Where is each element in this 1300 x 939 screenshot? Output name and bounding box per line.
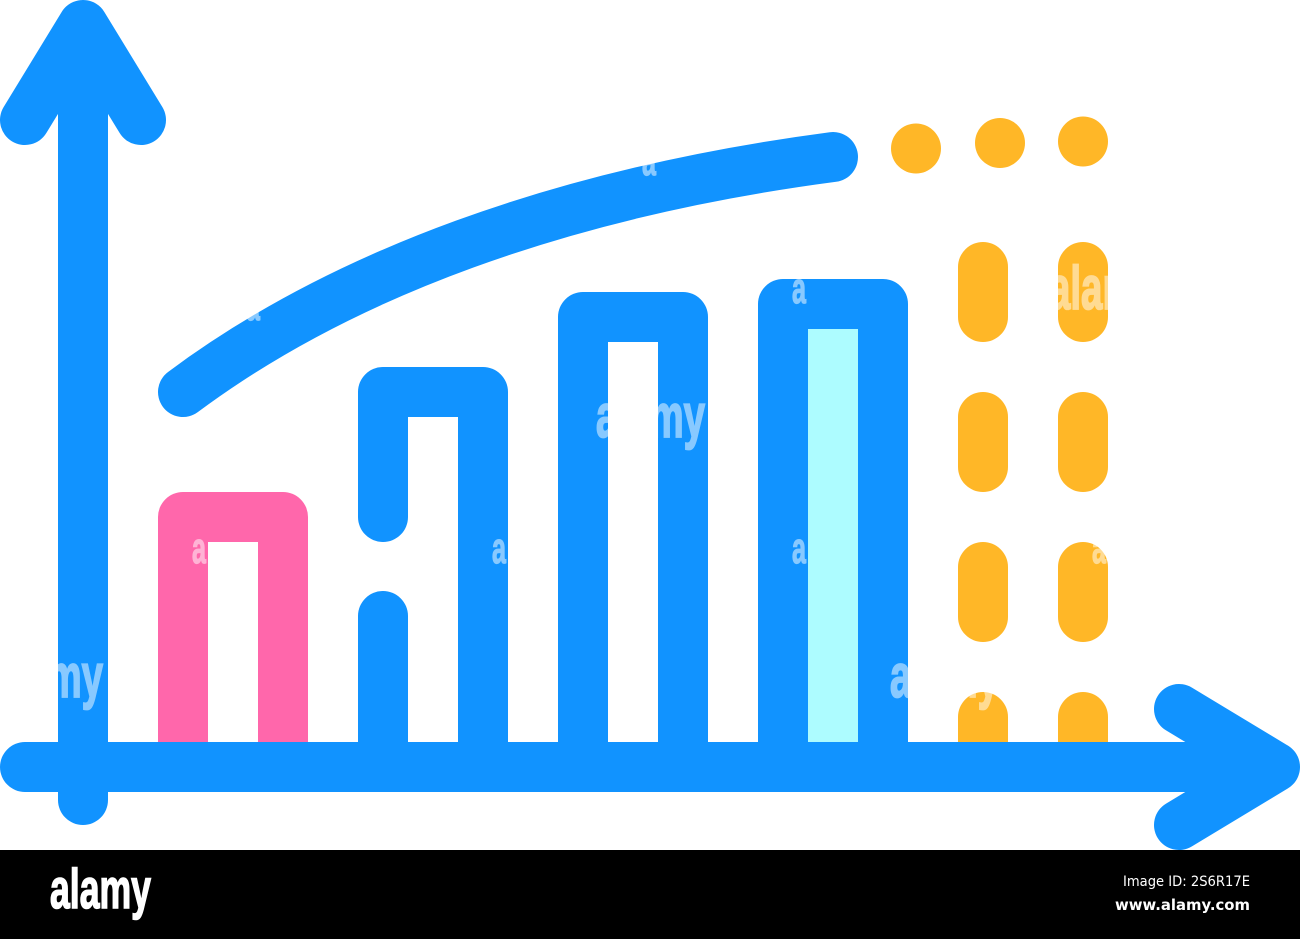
bar 3 bbox=[583, 317, 683, 767]
watermark text: a bbox=[246, 281, 260, 330]
footer image id: Image ID: 2S6R17E bbox=[1123, 874, 1250, 890]
watermark text: a bbox=[192, 524, 206, 573]
watermark text: a bbox=[1092, 524, 1106, 573]
bar 4 bbox=[783, 304, 883, 767]
watermark text: a bbox=[492, 524, 506, 573]
dashes left bbox=[958, 242, 1008, 750]
dashed projection lines bbox=[891, 116, 1108, 750]
dashes right bbox=[1058, 242, 1108, 750]
bar 2 bbox=[383, 392, 483, 767]
footer band bbox=[0, 850, 1300, 939]
watermark text: a bbox=[792, 524, 806, 573]
watermark text: alamy bbox=[596, 382, 705, 450]
watermark text: a bbox=[792, 264, 806, 313]
dots top bbox=[891, 116, 1108, 174]
watermark text bbox=[0, 136, 1158, 710]
footer logo: alamy bbox=[50, 857, 151, 920]
watermark text: alamy bbox=[890, 642, 999, 710]
y axis arrow bbox=[25, 25, 141, 800]
footer url: www.alamy.com bbox=[1115, 896, 1250, 914]
watermark text: alamy bbox=[1049, 254, 1158, 322]
x axis arrow bbox=[25, 709, 1275, 825]
bar 4 cyan fill bbox=[808, 329, 858, 749]
pink bar bbox=[183, 517, 283, 767]
trend curve bbox=[183, 157, 833, 392]
watermark text: a bbox=[642, 136, 656, 185]
